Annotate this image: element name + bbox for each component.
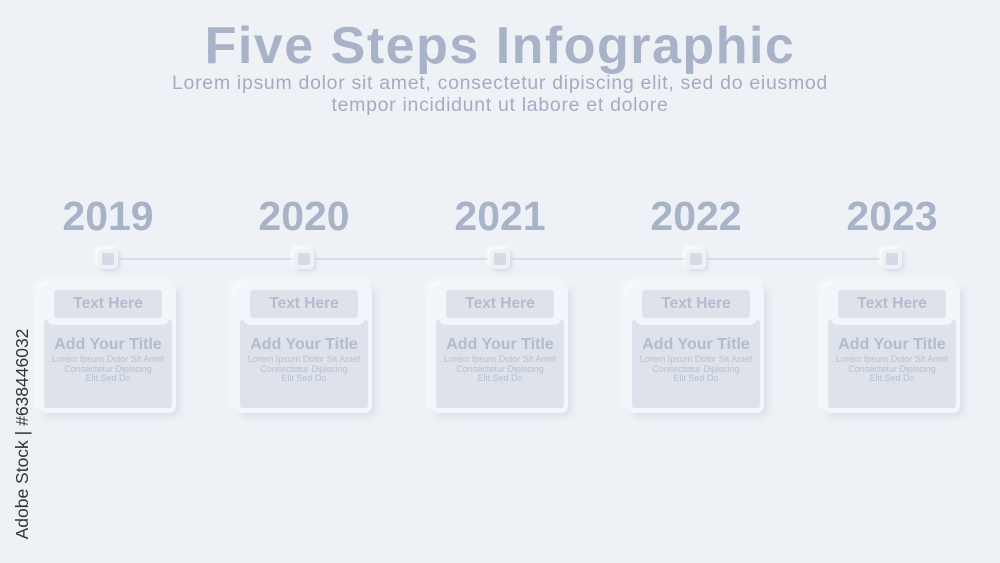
card: Elit Sed Do: [477, 373, 523, 383]
timeline line: [108, 258, 892, 260]
node: [882, 249, 902, 269]
title: Five Steps Infographic: [205, 17, 795, 75]
card: Add Your Title: [642, 336, 750, 353]
card: Text Here: [73, 295, 143, 312]
step 2021: [430, 193, 572, 418]
step 2019: [38, 193, 180, 418]
card: Lorem Ipsum Dolor Sit Amet: [248, 354, 360, 364]
subtitle: [172, 72, 828, 116]
card: Consectetur Dipiscing: [848, 364, 936, 374]
step 2023: [822, 193, 964, 418]
card: Consectetur Dipiscing: [652, 364, 740, 374]
year: 2022: [650, 193, 742, 239]
card: Elit Sed Do: [281, 373, 327, 383]
card: Consectetur Dipiscing: [456, 364, 544, 374]
subtitle: tempor incididunt ut labore et dolore: [331, 94, 668, 116]
step 2022: [626, 193, 768, 418]
node: [294, 249, 314, 269]
subtitle: Lorem ipsum dolor sit amet, consectetur dipiscing elit, sed do eiusmod: [172, 72, 828, 94]
card: Elit Sed Do: [869, 373, 915, 383]
card: [236, 285, 372, 413]
year: 2020: [258, 193, 350, 239]
card: [432, 285, 568, 413]
step 2020: [234, 193, 376, 418]
card: Lorem Ipsum Dolor Sit Amet: [836, 354, 948, 364]
node: [490, 249, 510, 269]
card: Text Here: [661, 295, 731, 312]
watermark id: Adobe Stock | #638446032: [12, 329, 32, 539]
card: Consectetur Dipiscing: [64, 364, 152, 374]
card: Elit Sed Do: [673, 373, 719, 383]
card: Text Here: [857, 295, 927, 312]
card: Elit Sed Do: [85, 373, 131, 383]
card: Add Your Title: [838, 336, 946, 353]
node: [98, 249, 118, 269]
card: Lorem Ipsum Dolor Sit Amet: [444, 354, 556, 364]
card: [628, 285, 764, 413]
card: [40, 285, 176, 413]
year: 2019: [62, 193, 154, 239]
card: Add Your Title: [54, 336, 162, 353]
card: [824, 285, 960, 413]
card: Add Your Title: [446, 336, 554, 353]
year: 2023: [846, 193, 938, 239]
card: Text Here: [269, 295, 339, 312]
node: [686, 249, 706, 269]
card: Text Here: [465, 295, 535, 312]
year: 2021: [454, 193, 546, 239]
card: Lorem Ipsum Dolor Sit Amet: [640, 354, 752, 364]
card: Lorem Ipsum Dolor Sit Amet: [52, 354, 164, 364]
card: Add Your Title: [250, 336, 358, 353]
card: Consectetur Dipiscing: [260, 364, 348, 374]
